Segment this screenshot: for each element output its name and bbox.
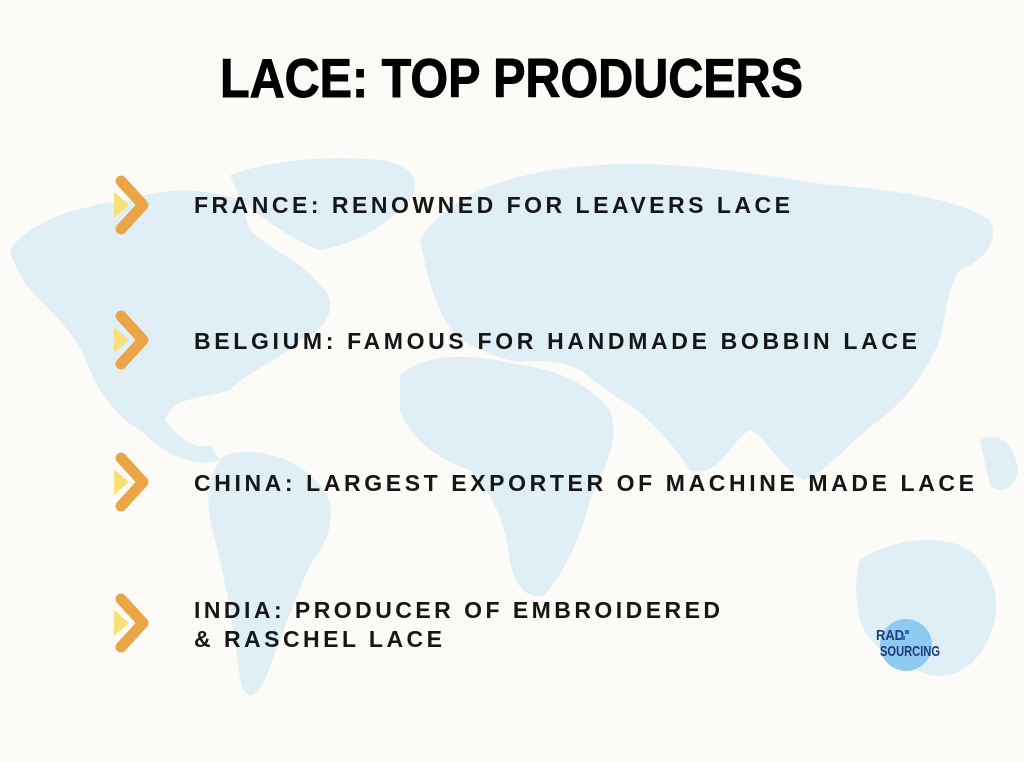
icon: chevron: [114, 316, 143, 364]
logo: Rad Sourcing: [876, 619, 940, 671]
icon: chevron: [114, 458, 143, 506]
icon: chevron: [114, 599, 143, 647]
world map background: [10, 158, 1018, 695]
logo: Rad Sourcing: SOURCING: [880, 643, 940, 660]
item: Belgium: [114, 316, 917, 364]
title: LACE: TOP PRODUCERS: [220, 47, 803, 109]
item: France: [114, 181, 790, 229]
text: France: FRANCE: RENOWNED FOR LEAVERS LACE: [194, 192, 790, 218]
logo: Rad Sourcing: RAD: [876, 627, 904, 644]
icon: chevron: [114, 181, 143, 229]
text: Belgium: BELGIUM: FAMOUS FOR HANDMADE BOBBIN LACE: [194, 328, 917, 354]
text: China: CHINA: LARGEST EXPORTER OF MACHINE MADE LACE: [194, 470, 974, 496]
text: India: & RASCHEL LACE: [194, 626, 442, 652]
item: India: [114, 597, 720, 652]
item: China: [114, 458, 974, 506]
text: India: INDIA: PRODUCER OF EMBROIDERED: [194, 597, 720, 623]
